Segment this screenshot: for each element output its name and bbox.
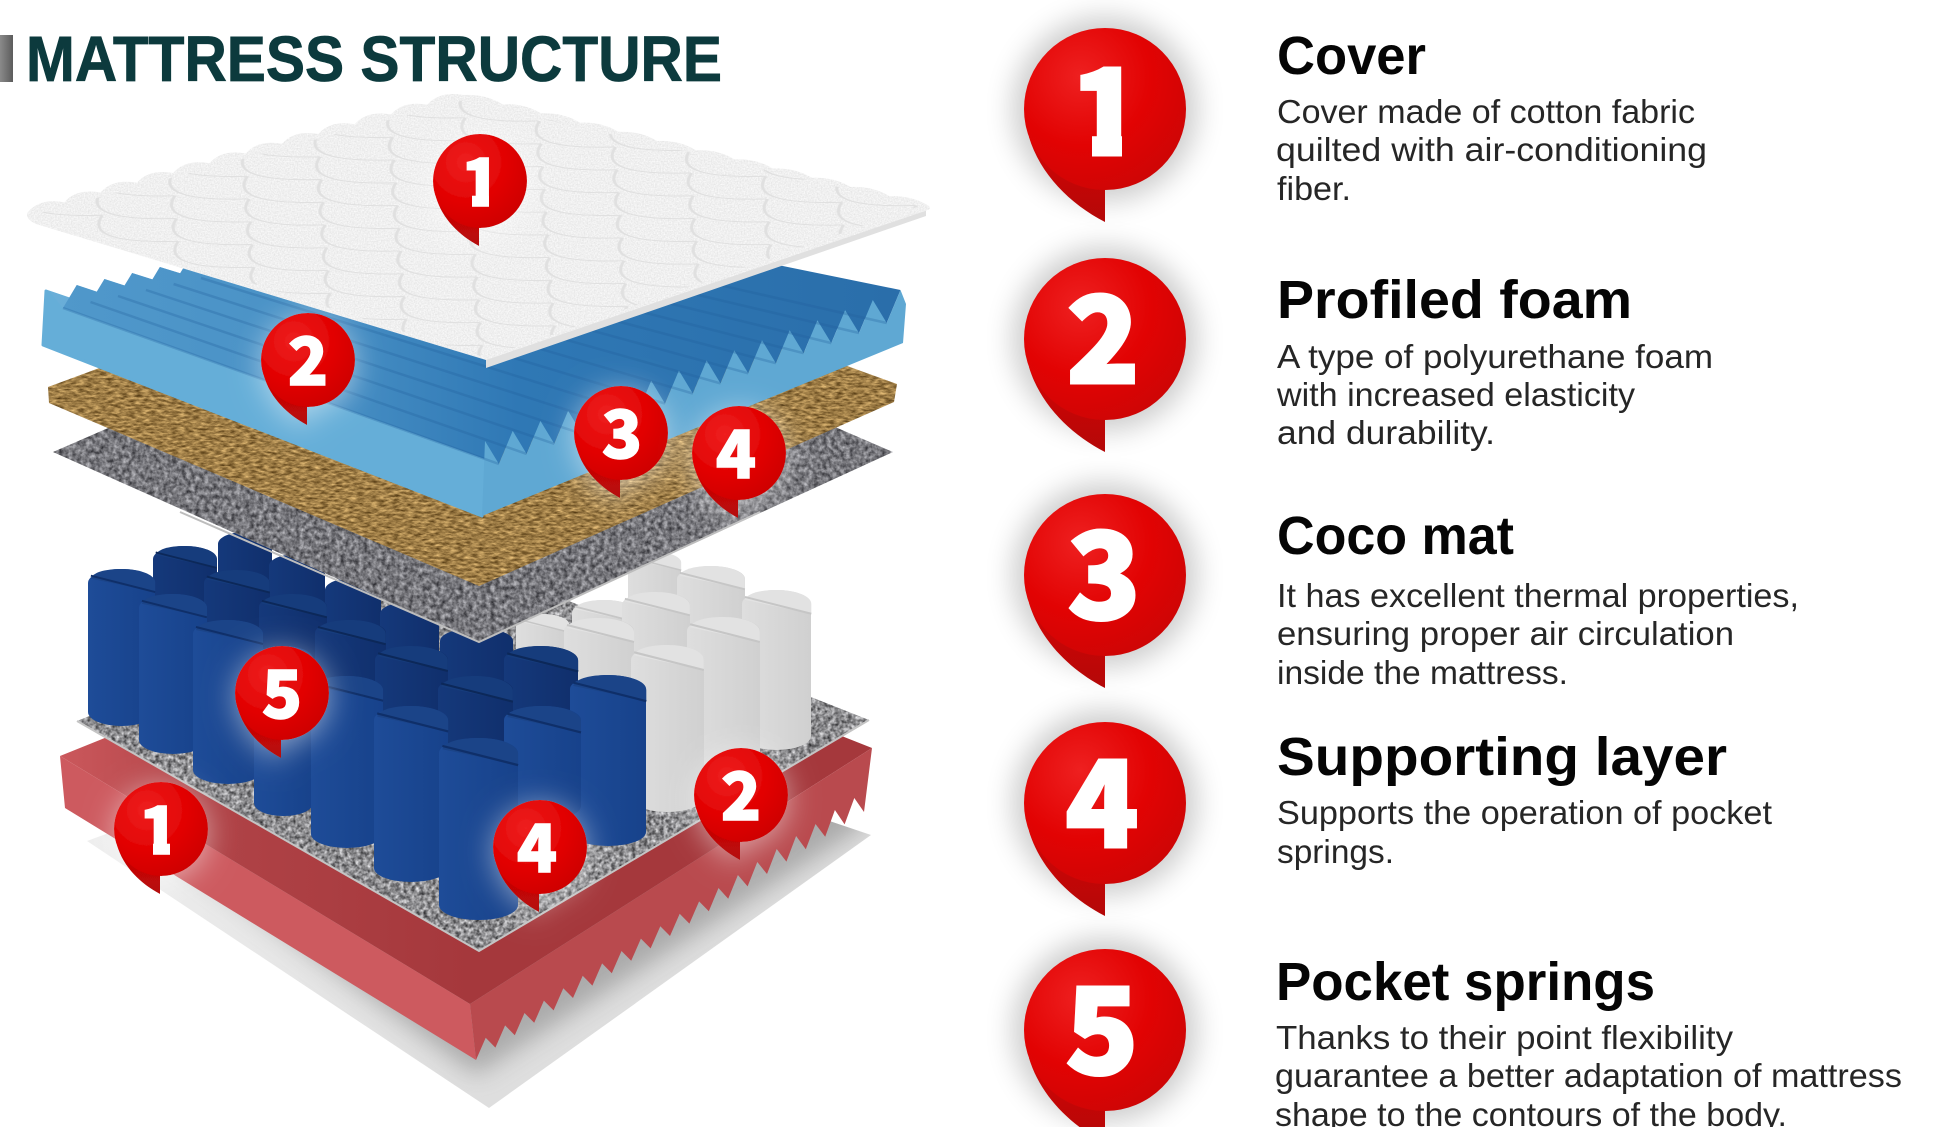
marker: lower supporting layer 4: [493, 796, 587, 912]
layer: white pocket springs: [516, 552, 811, 812]
legend icon: pin 3: 3: [1067, 480, 1141, 654]
marker: lower cover 1: [114, 778, 208, 894]
description: cover: [1276, 93, 1707, 207]
marker: cover 1: [433, 130, 527, 246]
marker: lower foam 2: 2: [721, 744, 761, 840]
description: profiled foam: A type of polyurethane foam: [1277, 338, 1713, 375]
marker: lower foam 2: [694, 744, 788, 860]
marker: pocket springs 5: 5: [262, 642, 302, 738]
marker: cover 1: 1: [461, 130, 501, 226]
legend icon: pin 4: 4: [1065, 708, 1139, 882]
legend icon: pin 4: [1013, 708, 1197, 916]
text block: pocket springs: [1275, 952, 1902, 1127]
text block: supporting layer: [1277, 727, 1772, 870]
heading: pocket springs: Pocket springs: [1276, 952, 1655, 1012]
marker: coco mat 3: [574, 382, 668, 498]
heading: coco mat: Coco mat: [1277, 506, 1514, 566]
heading: cover: Cover: [1277, 26, 1426, 86]
text block: cover: [1276, 26, 1707, 207]
layer: red foam: [60, 590, 872, 1060]
description: cover: quilted with air-conditioning: [1276, 131, 1707, 168]
layer: profiled blue foam: [43, 201, 906, 516]
description: coco mat: [1277, 577, 1799, 691]
description: profiled foam: and durability.: [1277, 414, 1495, 451]
layer: supporting felt: [53, 270, 893, 642]
legend icon: pin 3: [1013, 480, 1197, 688]
marker: lower cover 1: 1: [139, 778, 179, 874]
heading: profiled foam: Profiled foam: [1277, 270, 1632, 330]
description: supporting layer: Supports the operation of pocket: [1277, 794, 1772, 831]
marker: foam 2: [261, 309, 355, 425]
layer: blue pocket springs: [88, 532, 646, 920]
text block: profiled foam: [1276, 270, 1713, 451]
legend icon: pin 5: 5: [1065, 935, 1139, 1109]
description: supporting layer: [1277, 794, 1772, 870]
legend icon: pin 2: 2: [1066, 244, 1140, 418]
legend icon: pin 2: [1013, 244, 1197, 452]
description: coco mat: ensuring proper air circulation: [1277, 615, 1734, 652]
marker: lower supporting layer 4: 4: [517, 796, 557, 892]
legend icon: pin 1: [1013, 16, 1197, 222]
layer: coco mat: [48, 230, 897, 586]
description: pocket springs: guarantee a better adaptation of mattress: [1275, 1057, 1902, 1094]
title accent bar: [0, 35, 13, 82]
description: cover: fiber.: [1277, 170, 1351, 207]
title: [0, 23, 722, 95]
layer: quilted cover: [27, 94, 930, 368]
layer: white base: [88, 822, 871, 1108]
description: pocket springs: Thanks to their point flexibility: [1276, 1019, 1734, 1056]
description: supporting layer: springs.: [1277, 833, 1394, 870]
legend icon: pin 5: [1013, 935, 1197, 1127]
marker: supporting layer 4: [692, 402, 786, 518]
layer: lower felt: [77, 563, 869, 951]
marker: supporting layer 4: 4: [716, 402, 756, 498]
marker: coco mat 3: 3: [602, 382, 642, 478]
description: coco mat: inside the mattress.: [1277, 654, 1568, 691]
description: cover: Cover made of cotton fabric: [1277, 93, 1695, 130]
text block: coco mat: [1277, 506, 1799, 691]
description: pocket springs: [1275, 1019, 1902, 1127]
heading: supporting layer: Supporting layer: [1277, 727, 1727, 787]
title text: MATTRESS STRUCTURE: [26, 23, 722, 95]
marker: pocket springs 5: [235, 642, 329, 758]
description: profiled foam: with increased elasticity: [1276, 376, 1636, 413]
marker: foam 2: 2: [288, 309, 328, 405]
exploded mattress illustration: [27, 94, 930, 1108]
legend icon: pin 1: 1: [1070, 16, 1143, 190]
description: coco mat: It has excellent thermal properties,: [1277, 577, 1799, 614]
description: profiled foam: [1276, 338, 1713, 451]
